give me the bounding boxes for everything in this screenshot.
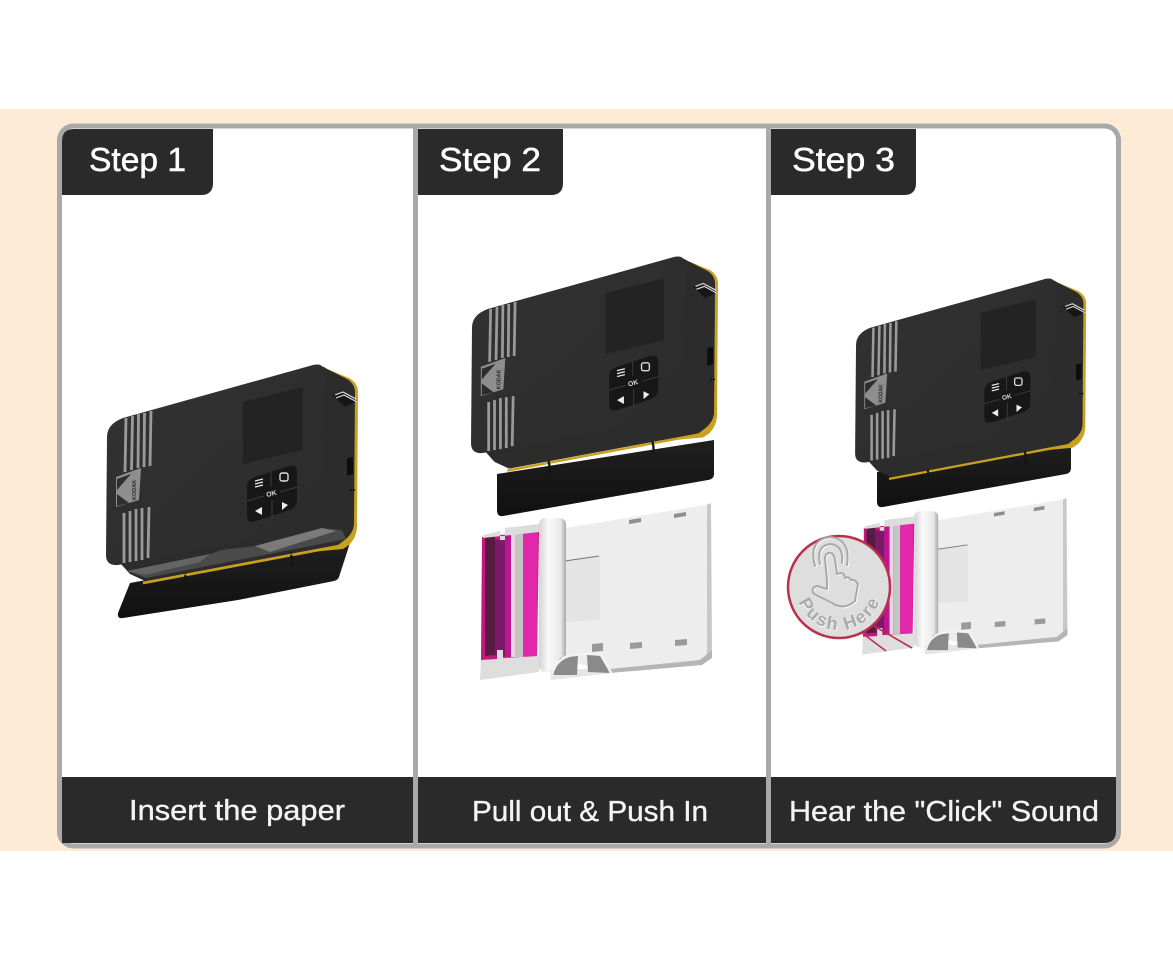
step 2 caption: Pull out & Push In [472,796,708,828]
panel: step 3 [771,129,1116,843]
step 3 heading tab [771,129,916,195]
printer with tray removed: OK [1001,393,1013,402]
printer with tray removed: OK [627,379,639,388]
printer with open paper door: OK [266,490,278,499]
icon: pressing hand [813,537,859,607]
callout: push here magnifier [786,534,912,652]
step 1 heading tab [62,129,213,195]
panel: step 2 [418,129,766,843]
printer with tray removed [471,256,718,516]
printer with tray removed: KODAK [879,384,885,403]
step 2 heading tab [418,129,563,195]
step cards frame [60,126,1118,846]
printer with open paper door [106,364,358,618]
printer with tray removed [855,278,1086,507]
callout: push here magnifier: Push Here [798,599,880,631]
peach background band [0,109,1173,851]
step 2 caption [418,777,766,843]
printer with tray removed: KODAK [496,369,502,389]
step 3 caption [771,777,1116,843]
step 1 caption: Insert the paper [129,795,345,827]
step 1 caption [62,777,413,843]
printer with open paper door: KODAK [132,480,138,500]
step 1 heading tab: Step 1 [89,141,186,178]
paper cartridge [862,498,1067,655]
step 2 heading tab: Step 2 [439,141,541,178]
callout: push here magnifier: Push Here [798,597,878,630]
step 3 caption: Hear the "Click" Sound [789,796,1099,828]
paper cartridge with ribbon [480,503,712,680]
panel: step 1 [62,129,413,843]
step 3 heading tab: Step 3 [792,141,895,178]
